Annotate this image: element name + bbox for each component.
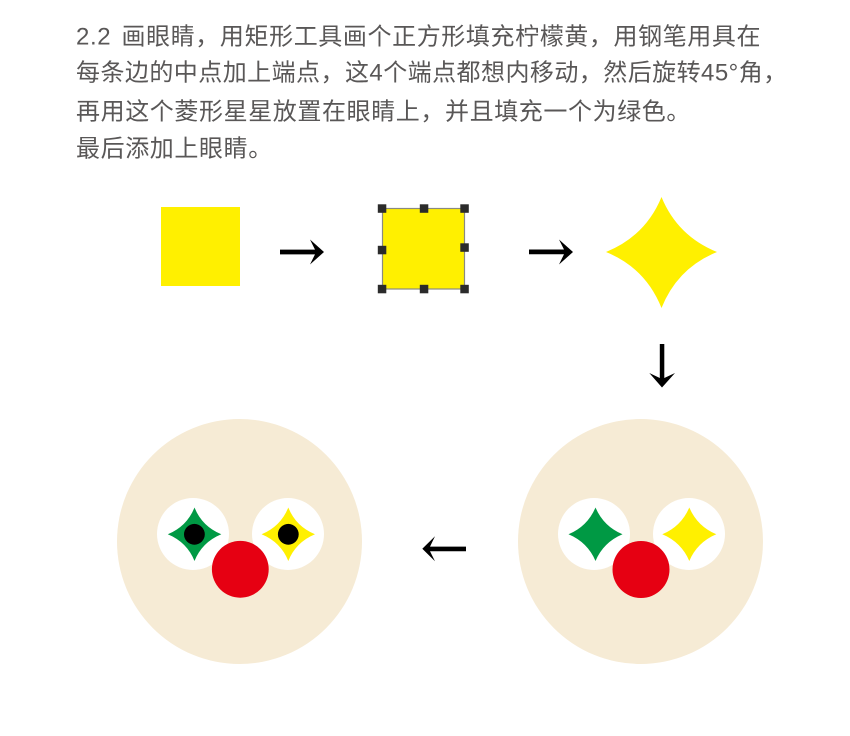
green star bbox=[168, 508, 221, 561]
yellow star bbox=[662, 508, 716, 561]
yellow square bbox=[161, 207, 240, 286]
instruction text: 最后添加上眼睛。 bbox=[76, 136, 273, 163]
instruction text: 每条边的中点加上端点，这4个端点都想内移动，然后旋转45°角， bbox=[76, 60, 788, 87]
right pupil bbox=[278, 524, 299, 545]
red nose bbox=[212, 541, 269, 598]
instruction text: 再用这个菱形星星放置在眼睛上，并且填充一个为绿色。 bbox=[76, 99, 691, 126]
yellow star bbox=[262, 508, 315, 561]
instruction text: 2.2 bbox=[76, 24, 111, 51]
face: stars without pupils bbox=[518, 419, 763, 664]
yellow four-point star bbox=[606, 197, 717, 308]
red nose bbox=[612, 541, 670, 598]
green star bbox=[568, 508, 622, 561]
instruction text bbox=[76, 24, 788, 163]
instruction text: 画眼睛，用矩形工具画个正方形填充柠檬黄，用钢笔用具在 bbox=[122, 24, 761, 51]
arrow: down bbox=[649, 344, 675, 388]
arrow: right 1 bbox=[280, 240, 324, 264]
left pupil bbox=[184, 524, 205, 545]
arrow: right 2 bbox=[529, 240, 573, 264]
face: finished with pupils bbox=[117, 419, 362, 664]
square with anchor points bbox=[378, 204, 469, 293]
arrow: left bbox=[422, 536, 466, 561]
